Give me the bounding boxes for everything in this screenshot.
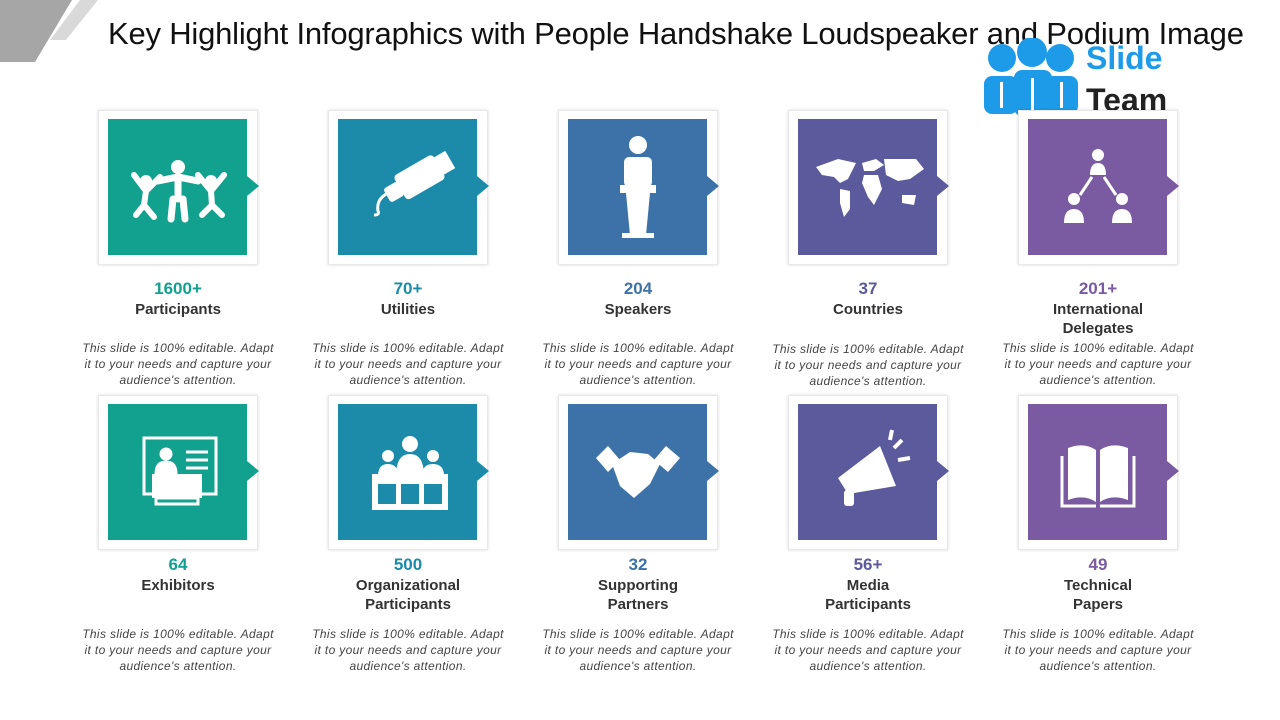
text: Participants (365, 596, 451, 613)
text: This slide is 100% editable. Adapt it to your needs and capture your audience's attention. (772, 342, 964, 388)
text: Technical (1064, 577, 1132, 594)
card: Utilities (327, 109, 489, 266)
text: This slide is 100% editable. Adapt it to your needs and capture your audience's attention. (82, 627, 274, 673)
card: Media Participants (787, 394, 949, 551)
text: This slide is 100% editable. Adapt it to your needs and capture your audience's attention. (542, 627, 734, 673)
text: 70+ (394, 279, 422, 298)
text: Delegates (1063, 320, 1133, 337)
text: 56+ (854, 555, 882, 574)
text: Speakers (605, 301, 671, 318)
text: Partners (608, 596, 668, 613)
text: This slide is 100% editable. Adapt it to your needs and capture your audience's attention. (312, 341, 504, 387)
card: Participants (97, 109, 259, 266)
decoration: corner stripes (0, 0, 98, 62)
text: This slide is 100% editable. Adapt it to your needs and capture your audience's attention. (542, 341, 734, 387)
title: Key Highlight Infographics with People Handshake Loudspeaker and Podium Image (108, 16, 1244, 51)
card: International Delegates (1017, 109, 1179, 266)
text: Supporting (598, 577, 678, 594)
logo: Slide Team: Team (1086, 82, 1167, 118)
card: Supporting Partners (557, 394, 719, 551)
card: Exhibitors (97, 394, 259, 551)
text: Participants (135, 301, 221, 318)
text: 500 (394, 555, 422, 574)
text: International (1053, 301, 1143, 318)
card: Organizational Participants (327, 394, 489, 551)
card: Speakers (557, 109, 719, 266)
text: 32 (629, 555, 647, 574)
logo: Slide Team: Slide (1086, 40, 1162, 76)
text: This slide is 100% editable. Adapt it to your needs and capture your audience's attention. (312, 627, 504, 673)
logo: Slide Team (984, 38, 1167, 118)
text: Exhibitors (141, 577, 215, 594)
row 1 texts: 1600+ (154, 279, 202, 298)
row 2 texts: 64 (169, 555, 187, 574)
text: 37 (859, 279, 877, 298)
text: 49 (1089, 555, 1107, 574)
text: 204 (624, 279, 652, 298)
text: Utilities (381, 301, 435, 318)
text: 201+ (1079, 279, 1117, 298)
text: This slide is 100% editable. Adapt it to your needs and capture your audience's attention. (82, 341, 274, 387)
text: Media (847, 577, 889, 594)
text: Countries (833, 301, 903, 318)
text: Organizational (356, 577, 460, 594)
card: Countries (787, 109, 949, 266)
text: This slide is 100% editable. Adapt it to your needs and capture your audience's attention. (1002, 627, 1194, 673)
card: Technical Papers (1017, 394, 1179, 551)
text: This slide is 100% editable. Adapt it to your needs and capture your audience's attention. (772, 627, 964, 673)
text: Participants (825, 596, 911, 613)
text: This slide is 100% editable. Adapt it to your needs and capture your audience's attention. (1002, 341, 1194, 387)
text: Papers (1073, 596, 1123, 613)
